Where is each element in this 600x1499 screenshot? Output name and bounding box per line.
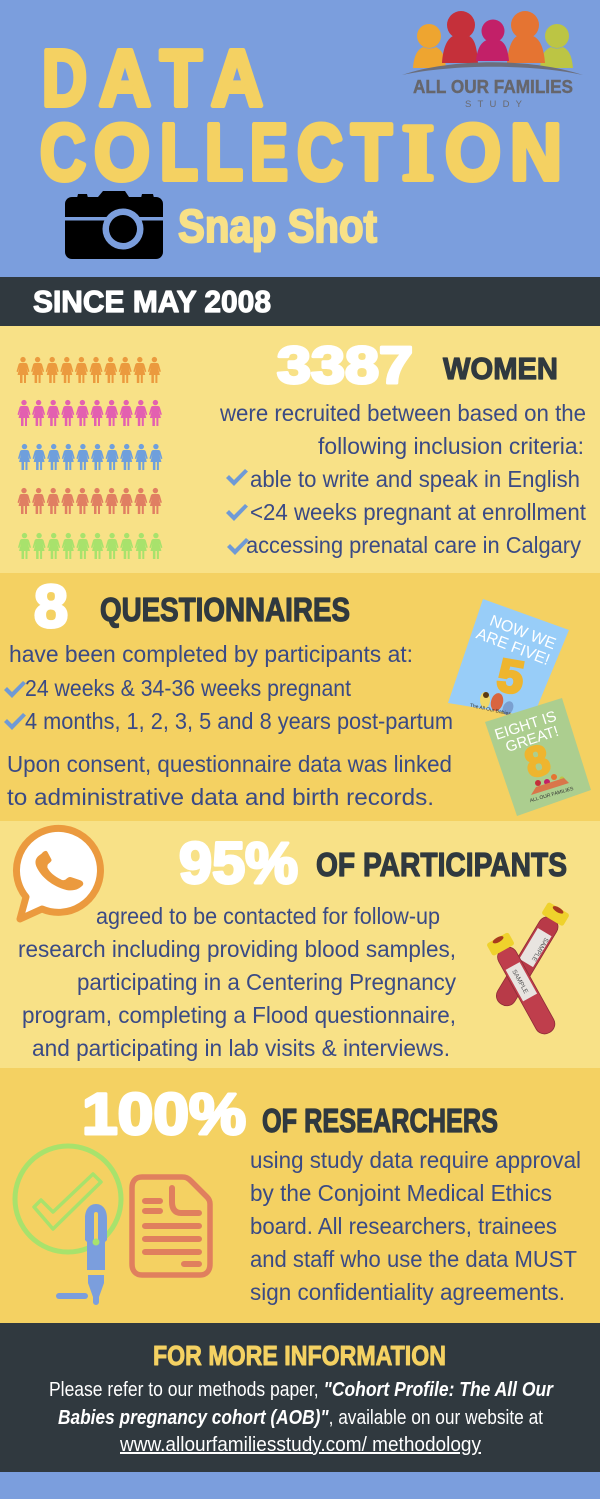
booklet: now we are five: ARE FIVE! xyxy=(474,625,552,669)
text: ethics approval: sign confidentiality agreements. xyxy=(250,1279,565,1305)
logo: All Our Families Study: STUDY xyxy=(465,99,523,110)
icon: document xyxy=(132,1177,210,1275)
title: Data Collection: L xyxy=(160,108,198,196)
text: completion timepoints: Upon consent, questionnaire data was linked xyxy=(7,751,452,777)
text: follow-up research xyxy=(18,903,456,1061)
text: ethics approval: by the Conjoint Medical Ethics xyxy=(250,1180,552,1206)
booklet: eight is great: EIGHT IS xyxy=(493,708,559,744)
booklet: eight is great: 8 xyxy=(520,735,555,787)
text: ethics approval: using study data require approval xyxy=(250,1147,581,1173)
text: follow-up research: participating in a Centering Pregnancy xyxy=(77,969,456,995)
text: follow-up research: program, completing a Flood questionnaire, xyxy=(22,1002,456,1028)
stat: 8: 8 xyxy=(34,573,68,640)
title: Data Collection: L xyxy=(205,108,243,196)
stat: 95%: 95% xyxy=(179,831,298,896)
text: ethics approval xyxy=(250,1147,581,1305)
banner: since May 2008 xyxy=(0,277,600,326)
text: ethics approval: and staff who use the data MUST xyxy=(250,1246,577,1272)
icon: blood sample tubes: SAMPLE xyxy=(510,969,529,996)
stat: 3387: 3387 xyxy=(277,337,413,395)
booklet: eight is great xyxy=(485,698,591,816)
header background xyxy=(0,0,600,277)
title: Data Collection: E xyxy=(250,108,288,196)
footer strip xyxy=(0,1472,600,1499)
text: methods paper reference: Please refer to our methods paper, "Cohort Profile: The All Our xyxy=(49,1379,554,1401)
booklet: eight is great: ALL OUR FAMILIES xyxy=(529,786,575,804)
title: Data Collection: A xyxy=(211,34,263,122)
text: completion timepoints xyxy=(7,641,453,810)
heading: women: WOMEN xyxy=(443,351,558,386)
text: inclusion criteria: <24 weeks pregnant at enrollment xyxy=(250,499,586,525)
icon: camera xyxy=(65,191,163,259)
icon: pen xyxy=(56,1204,107,1305)
text: completion timepoints: to administrative data and birth records. xyxy=(7,784,434,810)
booklet: now we are five: NOW WE xyxy=(487,612,558,653)
booklet: now we are five: 5 xyxy=(494,648,528,704)
title: Data Collection: C xyxy=(40,108,86,196)
title: Data Collection: T xyxy=(160,34,202,122)
panel: footer xyxy=(0,1323,600,1472)
title: Data Collection: T xyxy=(351,108,392,196)
title: Data Collection xyxy=(40,34,562,198)
text: inclusion criteria: able to write and speak in English xyxy=(250,466,580,492)
panel: participants xyxy=(0,821,600,1068)
icon: blood sample tubes xyxy=(486,901,570,1039)
text: completion timepoints: have been completed by participants at: xyxy=(9,641,413,667)
text: follow-up research: and participating in lab visits & interviews. xyxy=(32,1035,450,1061)
text: follow-up research: agreed to be contacted for follow-up xyxy=(96,903,440,929)
text: methods paper reference: Babies pregnancy cohort (AOB)", available on our website at xyxy=(58,1407,543,1429)
title: Data Collection: N xyxy=(510,108,562,196)
booklet: now we are five: The All Our Babies xyxy=(469,703,512,717)
title: Data Collection: A xyxy=(99,34,151,122)
panel: women recruited xyxy=(0,326,600,573)
title: Data Collection: C xyxy=(297,108,343,196)
title: Data Collection: D xyxy=(42,34,87,122)
icon: approved check circle xyxy=(15,1146,121,1252)
icons: check marks xyxy=(226,469,249,555)
text: follow-up research: research including providing blood samples, xyxy=(18,936,456,962)
heading: of researchers: OF RESEARCHERS xyxy=(262,1102,498,1139)
heading: for more information: FOR MORE INFORMATION xyxy=(153,1340,446,1371)
banner: since May 2008: SINCE MAY 2008 xyxy=(33,284,271,319)
stat: 100%: 100% xyxy=(82,1082,246,1147)
text: ethics approval: board. All researchers, trainees xyxy=(250,1213,557,1239)
booklet: now we are five xyxy=(448,599,569,717)
text: methods paper reference: www.allourfamiliesstudy.com/ methodology xyxy=(119,1434,481,1456)
panel: researchers xyxy=(0,1068,600,1323)
text: completion timepoints: 24 weeks & 34-36 weeks pregnant xyxy=(25,675,351,701)
icon: phone speech bubble xyxy=(16,828,100,919)
text: methods paper reference xyxy=(49,1379,554,1456)
heading: questionnaires: QUESTIONNAIRES xyxy=(100,591,350,628)
text: inclusion criteria: following inclusion criteria: xyxy=(318,433,584,459)
title: Data Collection: O xyxy=(94,108,150,196)
icon: blood sample tubes: SAMPLE xyxy=(530,936,549,963)
text: inclusion criteria: were recruited between based on the xyxy=(219,400,586,426)
subtitle: Snap Shot: Snap Shot xyxy=(178,200,377,252)
logo: All Our Families Study xyxy=(402,11,583,110)
title: Data Collection: O xyxy=(445,108,501,196)
panel: questionnaires xyxy=(0,573,600,821)
text: completion timepoints: 4 months, 1, 2, 3, 5 and 8 years post-partum xyxy=(25,708,453,734)
icon array: women xyxy=(16,357,162,559)
logo: All Our Families Study: ALL OUR FAMILIES xyxy=(413,77,573,97)
text: inclusion criteria xyxy=(219,400,586,558)
title: Data Collection: I xyxy=(402,110,434,198)
text: inclusion criteria: accessing prenatal care in Calgary xyxy=(246,532,581,558)
icons: check marks xyxy=(4,681,26,730)
booklet: eight is great: GREAT! xyxy=(503,723,561,756)
